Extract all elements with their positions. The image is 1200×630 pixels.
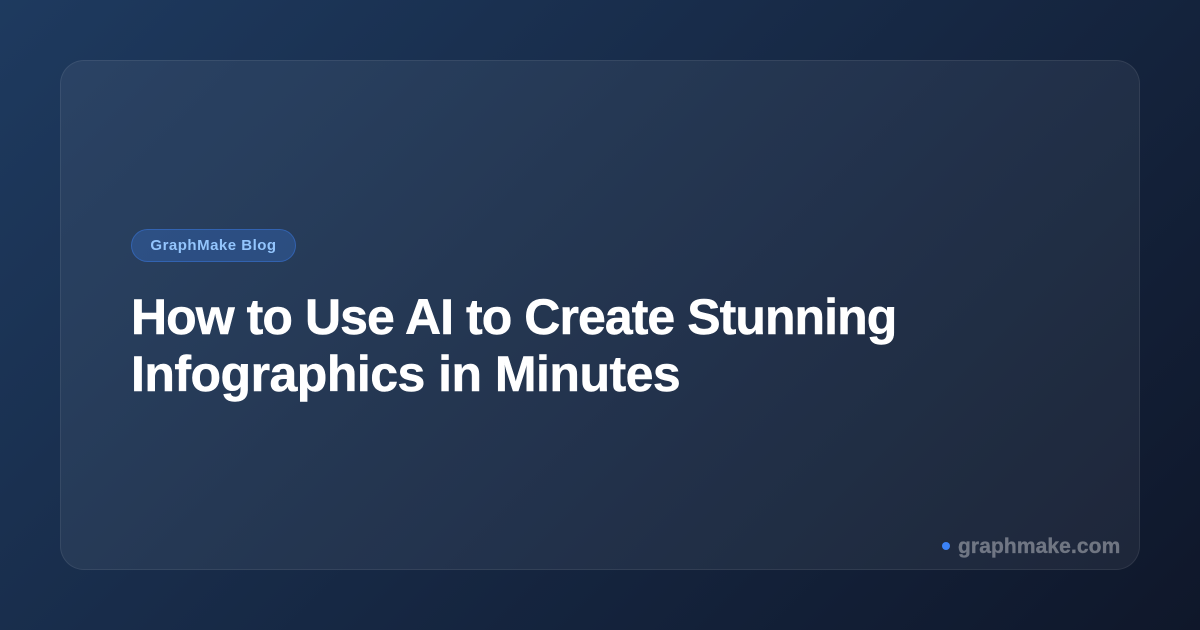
- title: How to Use AI to Create Stunning: [131, 289, 896, 345]
- badge: GraphMake Blog: [131, 229, 296, 262]
- brand url text: graphmake.com: [958, 535, 1120, 558]
- title: [131, 289, 896, 402]
- icon: blue dot: [942, 542, 950, 550]
- badge: GraphMake Blog: GraphMake Blog: [150, 237, 277, 254]
- title: Infographics in Minutes: [131, 346, 680, 402]
- panel: glass card: [60, 60, 1140, 570]
- brand: graphmake.com: [942, 535, 1120, 558]
